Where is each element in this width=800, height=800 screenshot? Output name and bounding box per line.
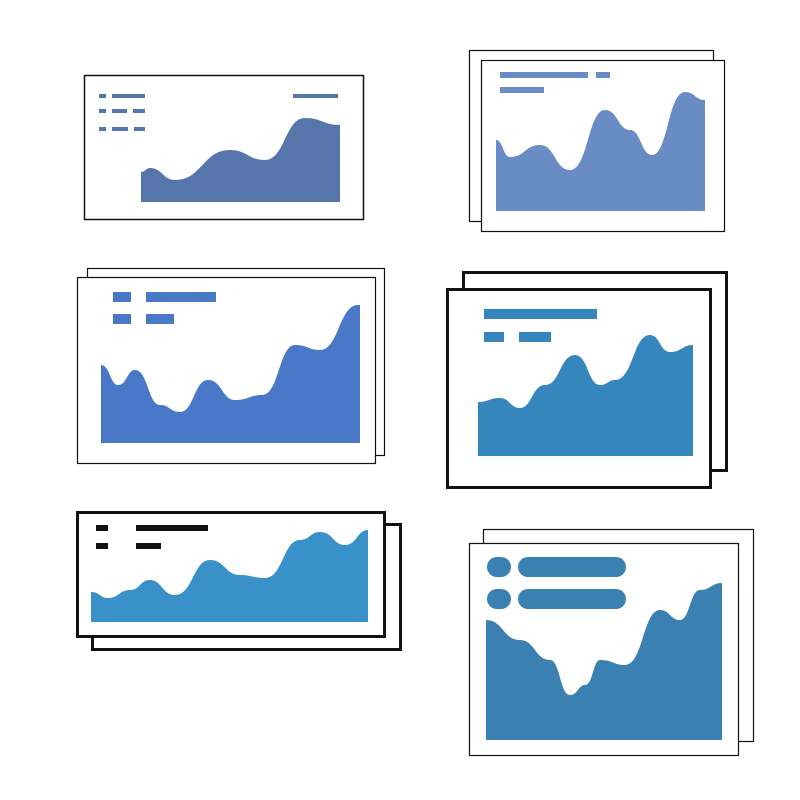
area chart 5	[91, 530, 368, 622]
area chart 1	[141, 118, 340, 202]
area chart 3	[101, 305, 360, 443]
panel: chart card 2	[470, 50, 724, 232]
header bars 2	[500, 72, 610, 93]
panel: chart card 6	[470, 530, 754, 756]
panel: chart card 3	[78, 268, 384, 464]
panel: chart card 4	[448, 272, 726, 488]
panel: chart card 5	[78, 512, 400, 650]
area chart 2	[496, 92, 705, 211]
area chart 4	[478, 335, 693, 456]
area chart 6	[486, 583, 722, 740]
pill bars 6	[487, 557, 626, 609]
header bars 4	[484, 309, 597, 342]
panel: chart card 1	[84, 76, 364, 220]
header bars 3	[113, 292, 216, 324]
header bars 5	[96, 525, 208, 549]
legend dashes 1	[99, 94, 338, 131]
